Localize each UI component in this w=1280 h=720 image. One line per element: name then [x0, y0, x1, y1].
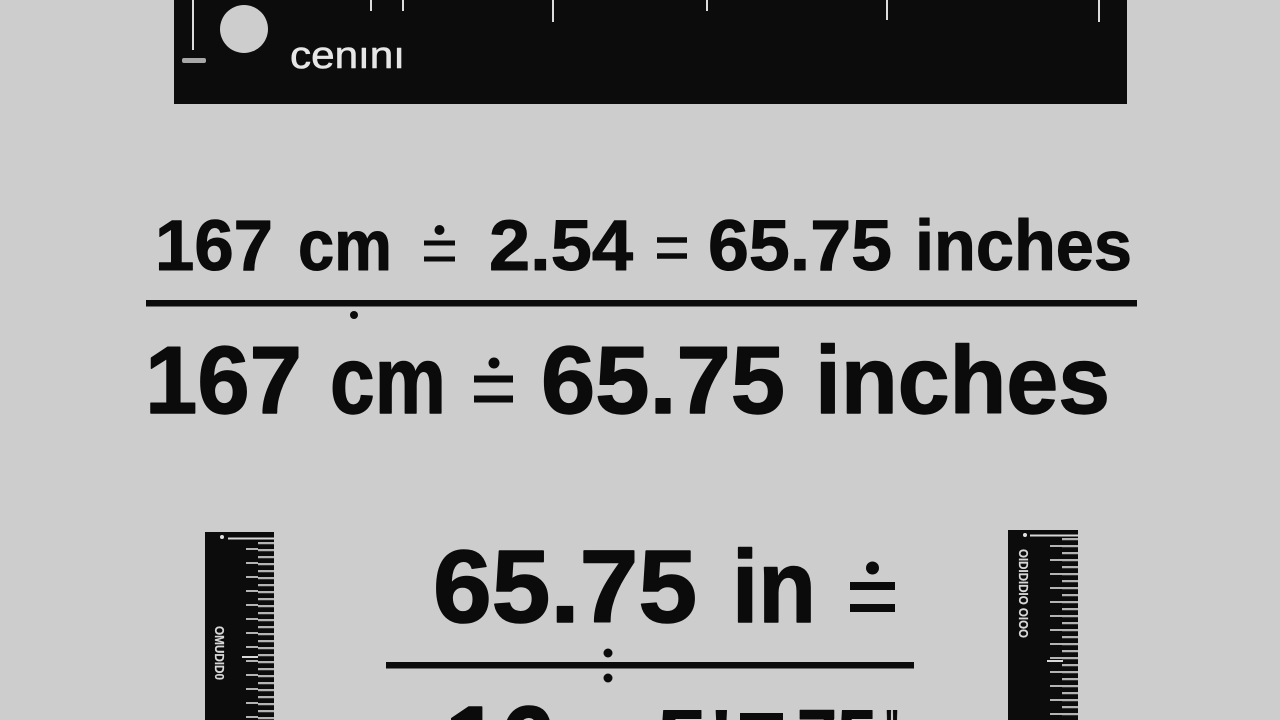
- right ruler label: OIDIDIDIO OIOO: [1016, 549, 1031, 638]
- equation line 1: 167 cm divided by 2.54 equals 65.75 inches: 2.54: [489, 207, 634, 286]
- equation line 2: 167 cm equals 65.75 inches: [145, 327, 1110, 434]
- divider rule 1: [146, 300, 1137, 319]
- equation line 2: 167 cm equals 65.75 inches: 65.75: [541, 327, 785, 434]
- ruler hole: [220, 5, 268, 53]
- equation line 2: 167 cm equals 65.75 inches: inches: [815, 327, 1110, 434]
- equation line 2: 167 cm equals 65.75 inches: 167: [145, 327, 302, 434]
- equation line 4, cropped at bottom edge: [445, 685, 899, 720]
- equation line 3: 65.75 in equals: [433, 529, 895, 644]
- equation line 3: 65.75 in equals: in: [732, 529, 816, 644]
- divider rule 2 with dots: [386, 648, 914, 682]
- equation line 3: 65.75 in equals: 65.75: [433, 529, 697, 644]
- equation line 1: 167 cm divided by 2.54 equals 65.75 inches: cm: [298, 207, 392, 286]
- left vertical ruler: [205, 532, 274, 720]
- equation line 1: 167 cm divided by 2.54 equals 65.75 inches: [155, 207, 1132, 286]
- equation line 1: 167 cm divided by 2.54 equals 65.75 inches: 65.75: [708, 207, 892, 286]
- equation line 2: 167 cm equals 65.75 inches: cm: [330, 327, 446, 434]
- ruler label: cenını: [290, 35, 405, 77]
- right vertical ruler: [1008, 530, 1078, 720]
- top ruler: [174, 0, 1127, 104]
- equation line 1: 167 cm divided by 2.54 equals 65.75 inches: 167: [155, 207, 273, 286]
- left ruler label: OMUDID0: [212, 626, 227, 680]
- equation line 1: 167 cm divided by 2.54 equals 65.75 inches: inches: [915, 207, 1132, 286]
